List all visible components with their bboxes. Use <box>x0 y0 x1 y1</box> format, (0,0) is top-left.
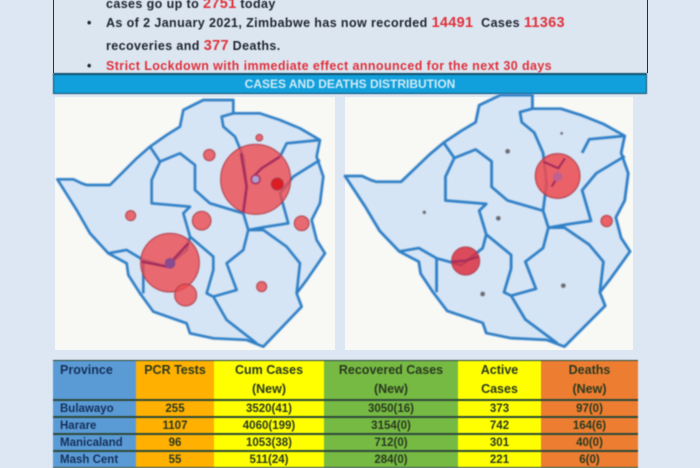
table: provincial statistics: 284(0) <box>374 454 408 466</box>
map: cases distribution <box>57 100 325 347</box>
table: provincial statistics: Cum Cases <box>235 363 303 377</box>
table: provincial statistics: Active <box>481 363 518 377</box>
table: provincial statistics: Recovered Cases <box>339 363 443 377</box>
table: provincial statistics: 742 <box>490 420 509 432</box>
bullet: lockdown: • <box>87 59 92 73</box>
bullet: national totals: • <box>87 16 92 30</box>
table: provincial statistics: 164(6) <box>573 420 606 432</box>
heading: cases and deaths distribution <box>53 73 647 94</box>
table: provincial statistics: Manicaland <box>60 437 123 449</box>
table: provincial statistics: 3154(0) <box>371 420 411 432</box>
table: provincial statistics: 6(0) <box>579 454 600 466</box>
table: provincial statistics: 1107 <box>163 420 187 432</box>
table: provincial statistics: 96 <box>169 437 181 449</box>
table: provincial statistics: 373 <box>490 403 509 415</box>
panel: right map background <box>345 97 633 350</box>
text: national totals: As of 2 January 2021, Zimbabwe has now recorded 14491 Cases 11363 <box>106 15 565 31</box>
table: provincial statistics: 1053(38) <box>246 437 292 449</box>
panel: left map background <box>55 97 335 350</box>
table: provincial statistics: 255 <box>165 403 185 415</box>
table: provincial statistics: Deaths <box>569 363 610 377</box>
table: provincial statistics: (New) <box>374 382 408 396</box>
panel: summary text <box>53 0 648 73</box>
table: provincial statistics: 712(0) <box>374 437 408 449</box>
table: provincial statistics: 511(24) <box>249 454 288 466</box>
heading: cases and deaths distribution: CASES AND DEATHS DISTRIBUTION <box>245 77 455 91</box>
text: recoveries and deaths: recoveries and 377 Deaths. <box>106 38 281 54</box>
map: deaths distribution <box>345 95 630 347</box>
table: provincial statistics: 301 <box>490 437 509 449</box>
table: provincial statistics: Bulawayo <box>60 403 114 415</box>
table: provincial statistics: (New) <box>572 382 607 396</box>
table: provincial statistics: 221 <box>490 454 509 466</box>
table: provincial statistics <box>53 360 638 468</box>
text: lockdown notice: Strict Lockdown with immediate effect announced for the next 30 days <box>106 59 552 73</box>
table: provincial statistics: Province <box>60 363 113 377</box>
table: provincial statistics: (New) <box>252 382 286 396</box>
table: provincial statistics: 3050(16) <box>368 403 414 415</box>
table: provincial statistics: 40(0) <box>576 437 603 449</box>
table: provincial statistics: Cases <box>481 382 518 396</box>
table: provincial statistics: 97(0) <box>576 403 603 415</box>
table: provincial statistics: 55 <box>169 454 181 466</box>
table: provincial statistics: 3520(41) <box>246 403 292 415</box>
table: provincial statistics: Mash Cent <box>60 454 118 466</box>
table: provincial statistics: 4060(199) <box>243 420 295 432</box>
table: provincial statistics: PCR Tests <box>144 363 206 377</box>
table: provincial statistics: Harare <box>60 420 96 432</box>
